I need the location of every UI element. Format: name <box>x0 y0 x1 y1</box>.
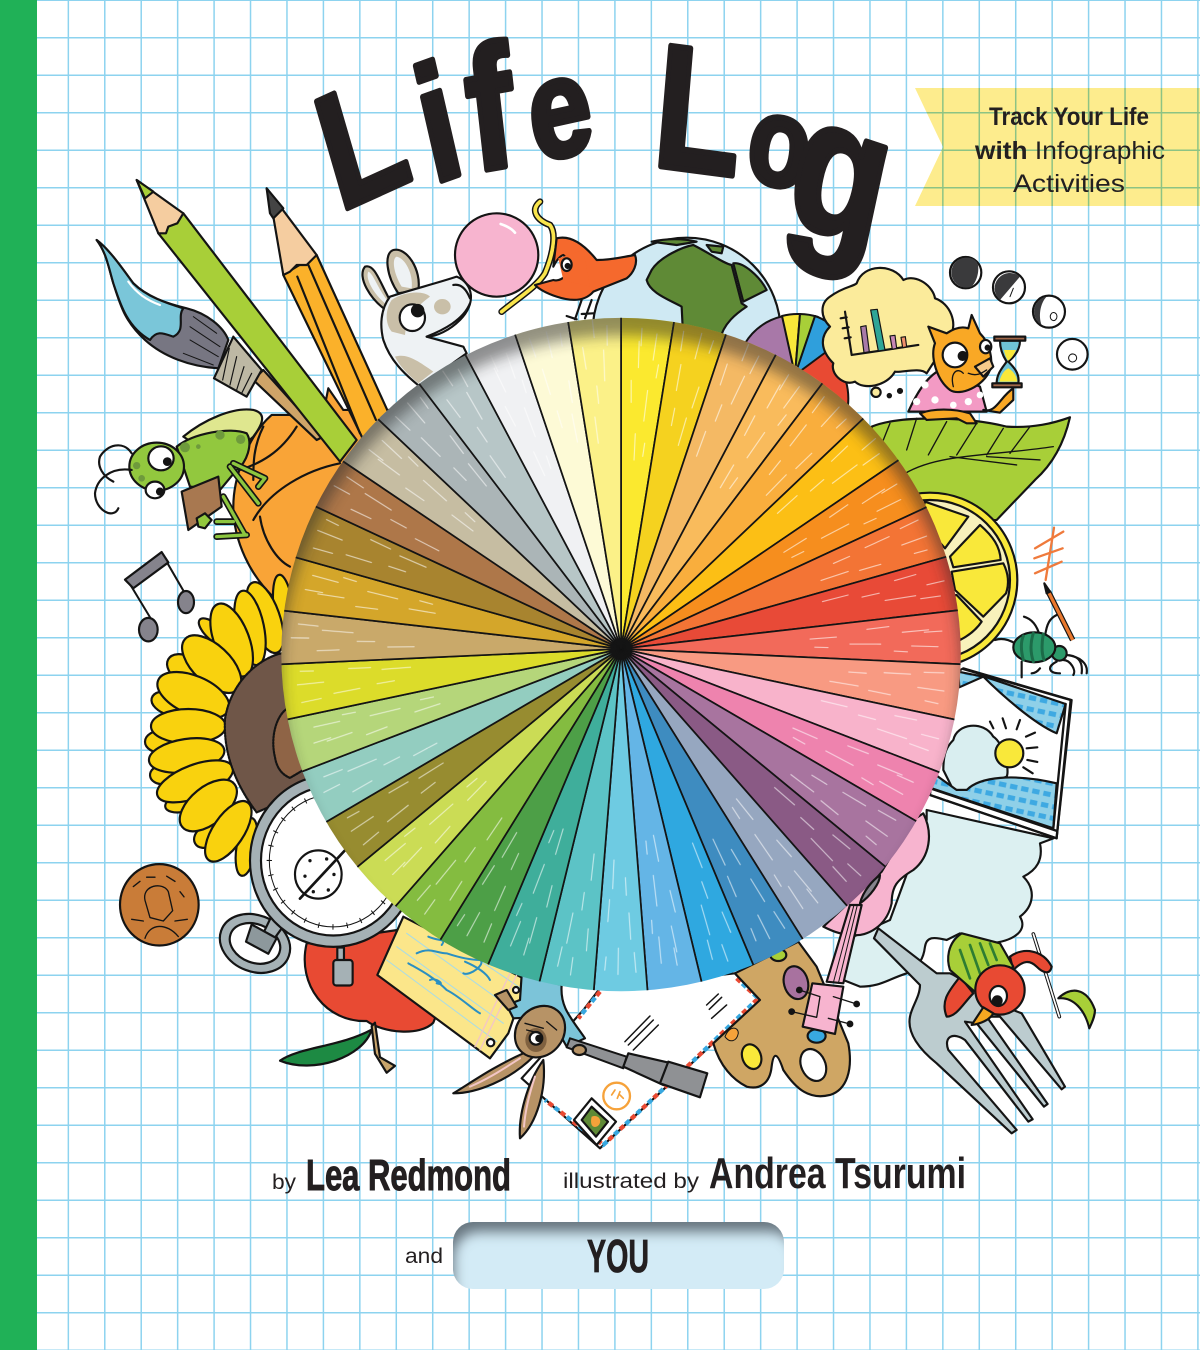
icon: yellow note <box>377 917 527 1058</box>
icon: big pale cloud <box>843 810 1053 987</box>
icon: stopwatch <box>212 774 417 985</box>
icon: apple <box>280 930 447 1073</box>
banner text: Track Your Life <box>989 103 1149 131</box>
lower right: clouds and fork <box>823 810 1095 1133</box>
icon: pie chart <box>737 314 854 430</box>
pencil scratch texture <box>291 319 947 977</box>
banner text <box>974 103 1165 198</box>
title: Life Log: L <box>648 7 750 214</box>
icon: rabbit with spyglass <box>453 975 707 1138</box>
byline: author <box>272 1151 511 1200</box>
bottom cluster: note, envelope, palette, rabbit <box>377 917 850 1148</box>
icon: paint palette <box>713 942 850 1096</box>
green spine strip <box>0 0 37 1350</box>
title: Life Log: f <box>456 7 525 209</box>
icon: fork <box>874 928 1065 1133</box>
title: Life Log <box>298 7 911 291</box>
icon: cat with hourglass <box>908 315 1025 423</box>
icon: tally marks and pencil <box>1034 528 1073 640</box>
inner shadow rim <box>281 318 961 822</box>
byline: author: by <box>272 1171 297 1194</box>
color wheel <box>281 318 961 1036</box>
icon: moon phases <box>950 257 1088 370</box>
byline: illustrator <box>563 1149 966 1198</box>
icon: lemon slice <box>843 493 1017 667</box>
icon: beetle <box>995 615 1087 677</box>
right side: lemon, tally, beetle, window <box>843 493 1087 838</box>
icon: paint brush <box>97 240 323 440</box>
icon: grasshopper with clipboard <box>95 409 265 537</box>
byline: illustrator: illustrated by <box>563 1170 700 1193</box>
icon: penny <box>120 864 199 945</box>
title: Life Log: i <box>400 28 476 218</box>
title: Life Log: L <box>298 37 425 245</box>
icon: pink cloud <box>823 813 929 935</box>
icon: window with sun and curtains <box>930 668 1072 838</box>
byline: author: Lea Redmond <box>306 1151 511 1200</box>
icon: music notes <box>125 552 194 641</box>
title: Life Log: g <box>774 50 911 291</box>
title: Life Log: o <box>740 67 820 219</box>
icon: violin over the wheel <box>789 875 880 1034</box>
banner text: Activities <box>1013 170 1125 198</box>
left cluster: pumpkin, brush, pencils, grasshopper <box>95 180 393 600</box>
icon: thought cloud with bar chart <box>822 268 953 397</box>
title: Life Log: e <box>518 23 601 191</box>
icon: leaf <box>867 417 1070 527</box>
yellow ribbon banner <box>915 88 1200 206</box>
byline: illustrator: Andrea Tsurumi <box>709 1149 966 1198</box>
icon: orange bird with tape <box>502 202 636 319</box>
icon: parrot on the fork with flag <box>944 933 1095 1028</box>
lower left cluster: notes, sunflower, penny, stopwatch, apple <box>120 552 447 1073</box>
and label: and <box>405 1245 443 1268</box>
icon: orange pencil <box>267 188 393 447</box>
icon: llama <box>362 250 471 387</box>
top cluster: globe, llama, bubble, bird <box>362 202 781 426</box>
banner text: with Infographic <box>974 137 1165 165</box>
icon: green pencil <box>137 180 357 462</box>
YOU label: YOU <box>587 1230 649 1282</box>
wheel slices <box>281 318 961 992</box>
icon: sunflower <box>145 573 320 878</box>
right cluster: leaf, thought cloud, cat, moons <box>822 257 1088 527</box>
icon: pumpkin <box>233 388 390 600</box>
icon: globe <box>593 238 781 426</box>
icon: envelope <box>522 973 760 1148</box>
name field: YOU box <box>453 1222 784 1289</box>
icon: pink bubble <box>455 213 538 297</box>
